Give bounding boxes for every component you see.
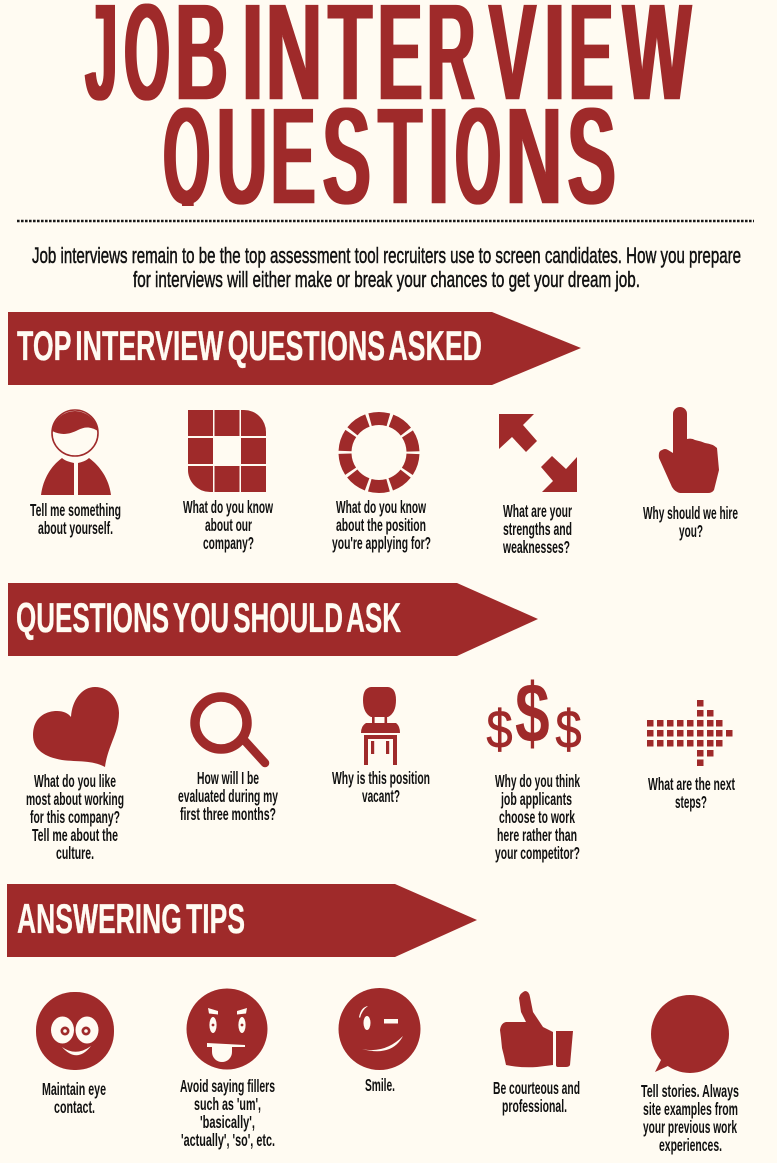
- icon: pointing hand: [659, 407, 719, 493]
- text: tip 1: [42, 1079, 106, 1117]
- text: question 9: choose to work: [499, 807, 575, 827]
- icon: pixel arrow: [647, 700, 732, 766]
- text: question 2: company?: [203, 533, 254, 553]
- text: question 8: vacant?: [362, 786, 400, 806]
- text: question 10: [648, 774, 735, 812]
- icon: dollar signs: $: [486, 700, 512, 760]
- text: tip 2: 'basically',: [200, 1112, 255, 1132]
- text: tip 4: [493, 1078, 580, 1116]
- text: tip 1: Maintain eye: [42, 1079, 106, 1099]
- heading banner: ANSWERING TIPS: [17, 895, 245, 942]
- text: tip 2: Avoid saying fillers: [180, 1076, 275, 1096]
- text: question 2: about our: [205, 515, 252, 535]
- text: tip 5: [641, 1081, 739, 1155]
- text: question 1: [30, 500, 121, 538]
- text: question 6: What do you like: [34, 771, 116, 791]
- text: question 1: about yourself.: [38, 518, 113, 538]
- text: question 6: for this company?: [30, 807, 120, 827]
- title: Q: [163, 77, 210, 234]
- title: [84, 4, 692, 206]
- text: question 9: [495, 771, 580, 863]
- text: question 5: you?: [679, 521, 703, 541]
- title: I: [428, 77, 449, 234]
- text: question 7: evaluated during my: [178, 786, 278, 806]
- text: question 4: strengths and: [503, 519, 572, 539]
- icon: heart: [33, 687, 119, 767]
- text: question 9: job applicants: [500, 789, 572, 809]
- text: tip 4: professional.: [502, 1096, 567, 1116]
- icon: dollar signs: [486, 666, 582, 760]
- text: tip 2: such as 'um',: [194, 1094, 261, 1114]
- icon: winking face: [338, 988, 420, 1070]
- text: question 4: What are your: [503, 501, 572, 521]
- heading banner: TOP INTERVIEW QUESTIONS ASKED: [17, 322, 482, 369]
- text: question 3: about the position: [336, 515, 426, 535]
- icon: rounded grid: [188, 410, 266, 492]
- text: question 8: [332, 768, 430, 806]
- title: E: [271, 79, 316, 235]
- icon: segmented ring: [345, 418, 413, 486]
- text: tip 5: experiences.: [659, 1135, 722, 1155]
- heading banner: QUESTIONS YOU SHOULD ASK: [16, 594, 401, 641]
- text: question 6: culture.: [56, 843, 94, 863]
- title: N: [506, 78, 562, 235]
- icon: tongue-out face: [186, 988, 268, 1070]
- text: question 7: [178, 768, 278, 824]
- text: question 6: most about working: [26, 789, 124, 809]
- text: question 2: [183, 497, 273, 553]
- icon: thumbs up: [500, 991, 573, 1067]
- panel: top interview questions asked: [8, 312, 738, 557]
- icon: person: [41, 410, 111, 495]
- icon: wide-eyed face: [36, 992, 114, 1070]
- icon: dollar signs: $: [515, 666, 550, 760]
- icon: speech bubble: [651, 995, 729, 1073]
- text: question 6: [26, 771, 124, 863]
- title: S: [322, 77, 371, 234]
- panel: questions you should ask: [8, 583, 735, 863]
- icon: magnifying glass: [195, 697, 265, 763]
- text: tip 3: Smile.: [365, 1075, 395, 1095]
- icon: chair: [361, 687, 400, 765]
- title: O: [455, 78, 501, 234]
- text: question 1: Tell me something: [30, 500, 121, 520]
- text: question 2: What do you know: [183, 497, 273, 517]
- text: question 3: you're applying for?: [332, 533, 431, 553]
- heading banner: [7, 884, 477, 957]
- panel: answering tips: [7, 884, 739, 1155]
- text: tip 1: contact.: [54, 1097, 95, 1117]
- icon: dollar signs: $: [556, 700, 582, 760]
- title: T: [378, 77, 422, 234]
- heading banner: [8, 312, 581, 385]
- text: question 9: your competitor?: [495, 843, 580, 863]
- text: question 7: first three months?: [180, 804, 276, 824]
- text: question 7: How will I be: [197, 768, 259, 788]
- text: question 8: Why is this position: [332, 768, 430, 788]
- text: question 6: Tell me about the: [32, 825, 118, 845]
- text: question 10: steps?: [675, 792, 707, 812]
- text: question 3: [332, 497, 431, 553]
- text: question 4: weaknesses?: [502, 537, 570, 557]
- text: question 3: What do you know: [336, 497, 426, 517]
- title: U: [217, 79, 267, 235]
- text: question 4: [502, 501, 572, 557]
- text: question 5: [643, 503, 738, 541]
- icon: opposing arrows: [499, 414, 577, 492]
- text: question 9: here rather than: [497, 825, 577, 845]
- text: question 9: Why do you think: [495, 771, 580, 791]
- text: tip 2: 'actually', 'so', etc.: [181, 1130, 275, 1150]
- title: S: [567, 77, 616, 234]
- text: tip 4: Be courteous and: [493, 1078, 580, 1098]
- heading banner: [8, 583, 538, 656]
- intro text: [32, 243, 741, 292]
- text: tip 2: [180, 1076, 275, 1150]
